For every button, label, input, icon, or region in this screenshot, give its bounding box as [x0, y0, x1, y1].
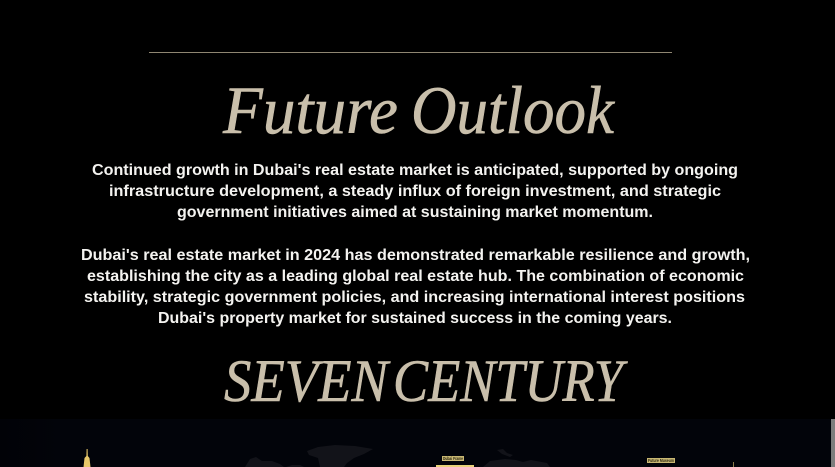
text block: conclusion paragraph: establishing the city as a leading global real estate hub. The combination of economic: [87, 268, 744, 285]
text block: conclusion paragraph: Dubai's property market for sustained success in the coming years.: [158, 310, 672, 327]
text block: outlook paragraph: [92, 162, 738, 221]
panel: Dubai skyline map: [0, 419, 835, 467]
text block: conclusion paragraph: [81, 247, 750, 327]
icon: Burj Khalifa tower: [84, 449, 90, 467]
title: Future Outlook: Future: [222, 72, 398, 148]
text block: outlook paragraph: infrastructure development, a steady influx of foreign investment, and strategic: [109, 183, 721, 200]
title: Future Outlook: Outlook: [411, 72, 616, 148]
text block: outlook paragraph: government initiatives aimed at sustaining market momentum.: [177, 204, 653, 221]
title: Future Outlook: [222, 72, 616, 148]
heading: SEVEN CENTURY: SEVEN: [224, 348, 391, 414]
heading: SEVEN CENTURY: [224, 348, 628, 414]
heading: SEVEN CENTURY: CENTURY: [393, 348, 628, 414]
icon: antenna: [733, 462, 734, 467]
text block: conclusion paragraph: Dubai's real estate market in 2024 has demonstrated remarkable resilience and growth,: [81, 247, 750, 264]
text block: conclusion paragraph: stability, strategic government policies, and increasing international interest positions: [84, 289, 745, 306]
text block: outlook paragraph: Continued growth in Dubai's real estate market is anticipated, supported by ongoing: [92, 162, 738, 179]
world map silhouette: [245, 445, 550, 467]
label: Future Museum: Future Museum: [648, 458, 674, 463]
label: Dubai Frame: Dubai Frame: [443, 456, 463, 461]
icon: Dubai Frame top: [436, 465, 474, 467]
